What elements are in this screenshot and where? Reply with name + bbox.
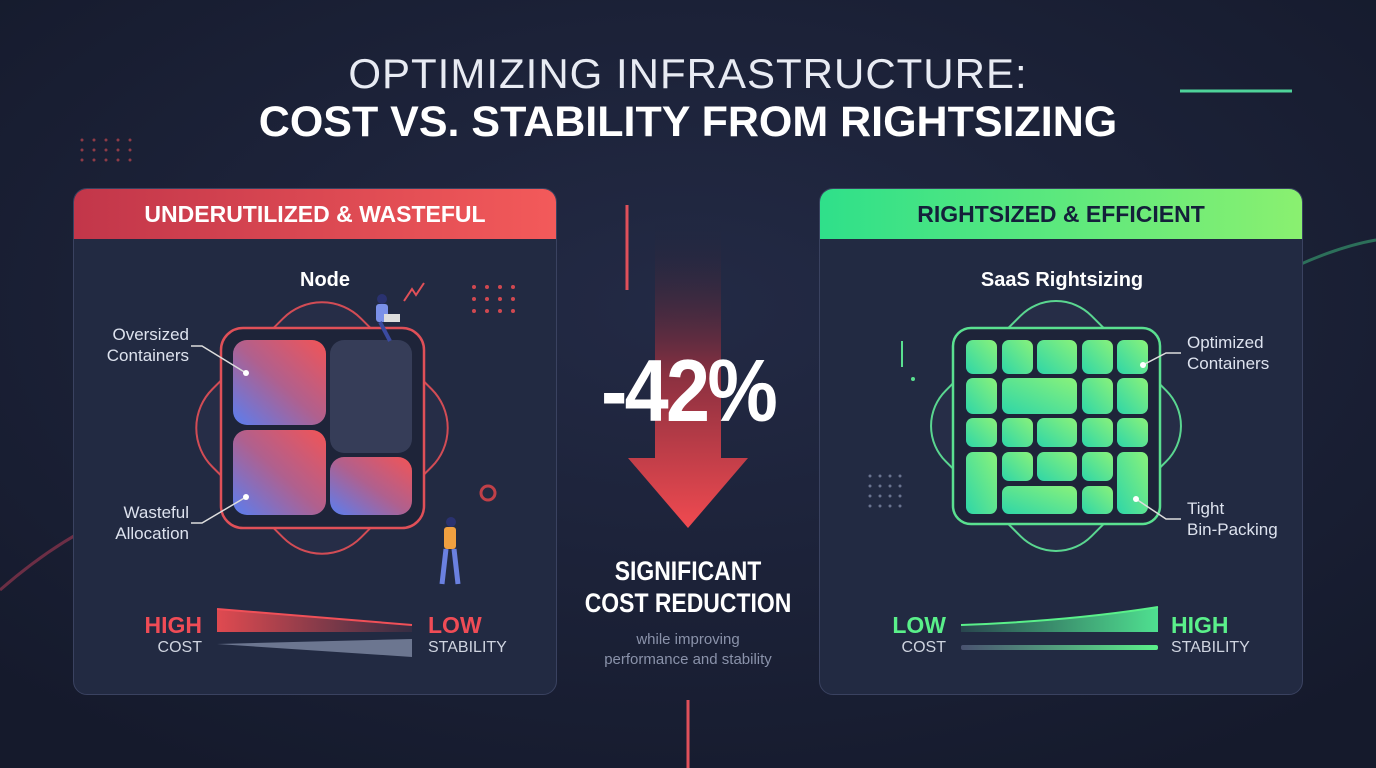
callout: optimized bbox=[1187, 333, 1269, 373]
callout: oversized: Containers bbox=[107, 346, 189, 365]
high cost bbox=[144, 612, 202, 656]
reduction text: SIGNIFICANT bbox=[615, 556, 761, 586]
grid diagram bbox=[868, 300, 1182, 650]
low stability: STABILITY bbox=[428, 639, 507, 656]
low cost: LOW bbox=[892, 612, 946, 638]
low cost bbox=[892, 612, 946, 656]
reduction text bbox=[585, 556, 791, 618]
callout: oversized bbox=[107, 325, 189, 365]
callout: wasteful bbox=[115, 503, 189, 543]
node diagram bbox=[191, 282, 515, 657]
header: underutilized bbox=[74, 189, 556, 239]
low stability: LOW bbox=[428, 612, 482, 638]
title bbox=[259, 50, 1117, 146]
center: reduction: while improving bbox=[636, 631, 740, 648]
panel: underutilized bbox=[73, 188, 557, 695]
callout: optimized: Optimized bbox=[1187, 333, 1264, 352]
title: OPTIMIZING INFRASTRUCTURE: bbox=[348, 50, 1028, 97]
high stability bbox=[1171, 612, 1250, 656]
high cost: HIGH bbox=[144, 612, 202, 638]
callout: tight: Tight bbox=[1187, 499, 1224, 518]
low stability bbox=[428, 612, 507, 656]
center: reduction bbox=[585, 265, 791, 668]
arrow bbox=[628, 265, 748, 528]
header: rightsized: RIGHTSIZED & EFFICIENT bbox=[917, 200, 1205, 226]
node label: Node bbox=[300, 269, 350, 291]
high stability: HIGH bbox=[1171, 612, 1228, 638]
low cost: COST bbox=[902, 639, 946, 656]
center: reduction: performance and stability bbox=[604, 651, 772, 668]
callout: oversized: Oversized bbox=[112, 325, 189, 344]
reduction text: COST REDUCTION bbox=[585, 588, 791, 618]
high cost: COST bbox=[158, 639, 202, 656]
callout: wasteful: Wasteful bbox=[123, 503, 189, 522]
callout: tight bbox=[1187, 499, 1278, 539]
header: rightsized bbox=[820, 189, 1302, 239]
panel: rightsized bbox=[819, 188, 1303, 695]
callout: optimized: Containers bbox=[1187, 354, 1269, 373]
saas label: SaaS Rightsizing bbox=[981, 269, 1143, 291]
header: underutilized: UNDERUTILIZED & WASTEFUL bbox=[144, 200, 486, 226]
callout: tight: Bin-Packing bbox=[1187, 520, 1278, 539]
callout: wasteful: Allocation bbox=[115, 524, 189, 543]
percent: -42% bbox=[601, 341, 775, 440]
high stability: STABILITY bbox=[1171, 639, 1250, 656]
title: COST VS. STABILITY FROM RIGHTSIZING bbox=[259, 98, 1117, 146]
